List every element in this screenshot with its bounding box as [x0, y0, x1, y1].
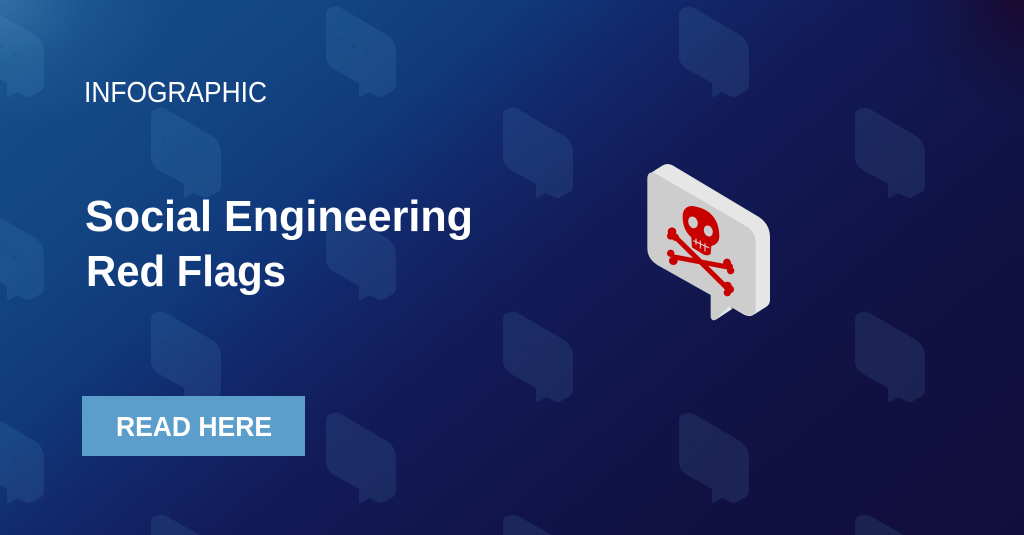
skull teeth — [693, 239, 709, 251]
skull — [683, 206, 719, 255]
crossed bones — [667, 227, 734, 296]
button: read here — [82, 396, 305, 456]
title: Social Engineering — [85, 192, 473, 241]
bubble face — [647, 172, 756, 320]
skull eyes — [687, 215, 699, 230]
bubble side — [652, 164, 770, 316]
eyebrow label: INFOGRAPHIC — [84, 77, 267, 109]
button: read here: READ HERE — [116, 411, 272, 442]
title: Red Flags — [86, 247, 286, 296]
title — [85, 192, 473, 296]
icon: speech bubble with skull and crossbones — [647, 164, 770, 320]
tail highlight — [716, 307, 733, 320]
